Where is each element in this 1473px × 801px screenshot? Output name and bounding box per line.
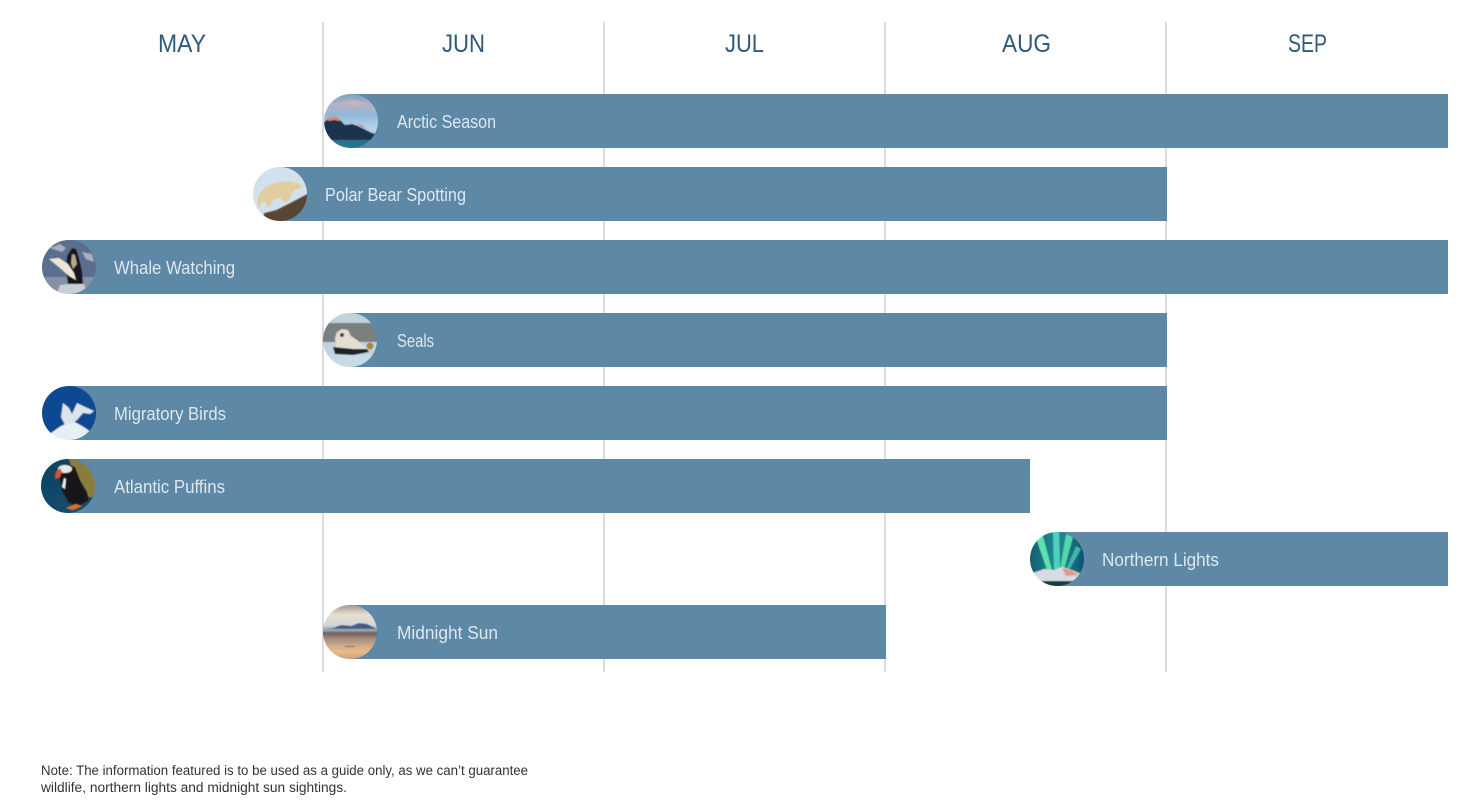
bar: Northern Lights <box>1028 530 1448 588</box>
icon: puffin <box>41 459 95 513</box>
bar: Northern Lights: Northern Lights <box>1102 550 1219 570</box>
bar: Atlantic Puffins: Atlantic Puffins <box>114 477 225 497</box>
bar: Seals: Seals <box>397 331 434 351</box>
bar: Atlantic Puffins <box>39 457 1030 515</box>
note: wildlife, northern lights and midnight sun sightings. <box>40 780 347 795</box>
bar: Midnight Sun: Midnight Sun <box>397 623 498 643</box>
month headings: SEP <box>1288 30 1327 58</box>
bar: Seals <box>321 311 1167 369</box>
icon: bird on ice <box>42 386 96 440</box>
icon: arctic mountains <box>324 94 378 148</box>
month headings <box>158 30 1327 58</box>
month headings: JUN <box>442 30 485 58</box>
bar: Whale Watching: Whale Watching <box>114 258 235 278</box>
month headings: AUG <box>1002 30 1051 58</box>
icon: seal <box>323 313 377 367</box>
bar: Arctic Season: Arctic Season <box>397 112 496 132</box>
bar: Arctic Season <box>322 92 1448 150</box>
bar: Midnight Sun <box>321 603 886 661</box>
bar: Whale Watching <box>40 238 1448 296</box>
bar: Polar Bear Spotting <box>251 165 1167 223</box>
bar: Migratory Birds <box>40 384 1167 442</box>
bar: Migratory Birds: Migratory Birds <box>114 404 226 424</box>
note: Note: The information featured is to be used as a guide only, as we can’t guarantee <box>41 763 528 778</box>
icon: polar bear <box>253 167 307 221</box>
month grid lines <box>323 22 1166 672</box>
bar: Polar Bear Spotting: Polar Bear Spotting <box>325 185 466 205</box>
month headings: JUL <box>725 30 764 58</box>
icon: breaching whale <box>42 240 96 294</box>
month headings: MAY <box>158 30 206 58</box>
icon: aurora <box>1030 532 1084 586</box>
note <box>40 763 528 795</box>
icon: midnight sun landscape <box>323 605 377 659</box>
